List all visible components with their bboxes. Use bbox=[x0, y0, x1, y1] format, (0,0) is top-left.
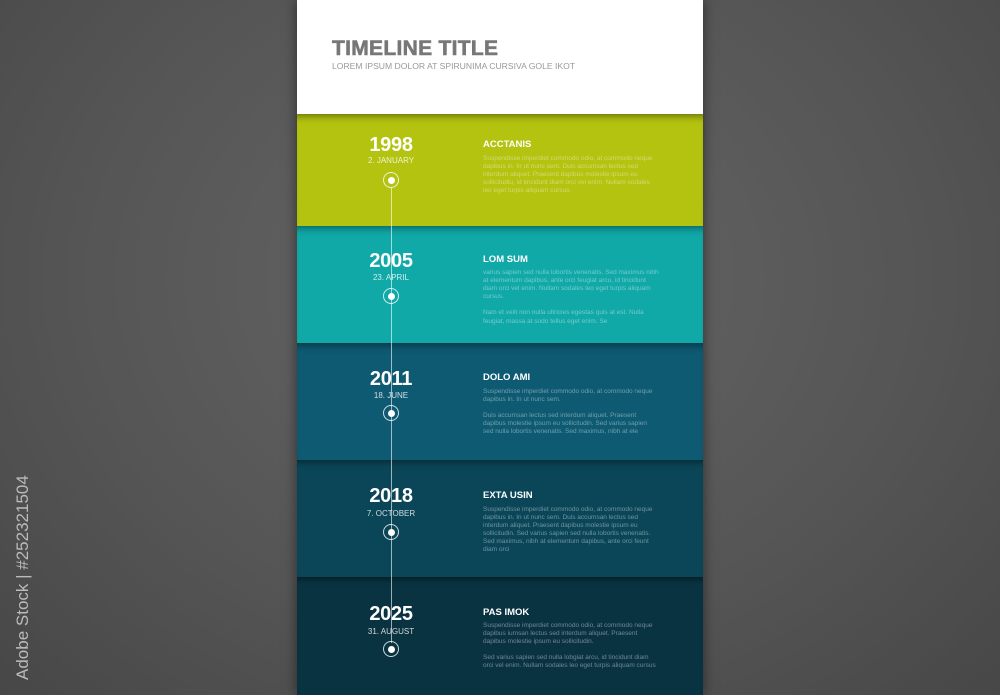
band 2011: 18. JUNE bbox=[374, 391, 408, 400]
band 2018: 7. OCTOBER bbox=[367, 509, 415, 518]
band 1998: 1998 bbox=[369, 134, 413, 156]
header bbox=[297, 0, 703, 114]
band 2025: Sed varius sapien sed nulla lobgiat arcu, id tincidunt diam orci vel enim. Nullam sodales leo eget turpis aliquam cursus bbox=[483, 654, 656, 669]
subtitle: LOREM IPSUM DOLOR AT SPIRUNIMA CURSIVA GOLE IKOT bbox=[332, 61, 575, 71]
band 2011: 2011 bbox=[370, 368, 412, 390]
band 2011: Duis accumsan lectus sed interdum aliquet. Praesent dapibus molestie ipsum eu sollicitudin. Sed varius sapien sed nulla lobortis venenatis. Sed maximus, nibh at ele bbox=[483, 412, 647, 435]
band 2025: Suspendisse imperdiet commodo odio, at commodo neque dapibus iumsan lectus sed interdum aliquet. Praesent dapibus molestie ipsum eu sollicitudin. bbox=[483, 622, 652, 645]
band 2005 bbox=[297, 226, 703, 343]
title: TIMELINE TITLE bbox=[332, 37, 498, 60]
band 2018: EXTA USIN bbox=[483, 490, 533, 501]
band 2005: LOM SUM bbox=[483, 254, 528, 265]
band 1998: ACCTANIS bbox=[483, 139, 531, 150]
band 2011: Suspendisse imperdiet commodo odio, at commodo neque dapibus in. In ut nunc sem. bbox=[483, 388, 652, 403]
band 2025: 31. AUGUST bbox=[368, 627, 414, 636]
band 2005: 23. APRIL bbox=[373, 273, 409, 282]
band 1998 bbox=[297, 114, 703, 226]
band 2025 bbox=[297, 577, 703, 695]
timeline axis line bbox=[391, 188, 392, 643]
band 2005: varius sapien sed nulla lobortis venenatis. Sed maximus nibh at elementum dapibus, ante orci feugiat arcu, id tincidunt diam orci vel enim. Nullam sodales leo eget turpis aliquam cursus. bbox=[483, 269, 659, 300]
band 1998: 2. JANUARY bbox=[368, 156, 414, 165]
band 1998: Suspendisse imperdiet commodo odio, at commodo neque dapibus in. In ut nunc sem. Duis accumsan lectus sed interdum aliquet. Praesent dapibus molestie ipsum eu sollicitudiu, id tincidunt diam orci vel enim. Nullam sodales leo eget turpis aliquam cursus. bbox=[483, 155, 652, 194]
credit: vertical text: Adobe Stock | #252321504 bbox=[13, 475, 32, 680]
band 2011 bbox=[297, 343, 703, 460]
band 2011: DOLO AMI bbox=[483, 372, 530, 383]
band 2025: 2025 bbox=[369, 603, 413, 625]
band 2018 bbox=[297, 460, 703, 577]
band 2025: PAS IMOK bbox=[483, 607, 529, 618]
panel: timeline page bbox=[297, 0, 703, 695]
band 2018: 2018 bbox=[369, 485, 413, 507]
band 2005: Nam et velit non nulla ultricies egestas quis at est. Nulla feugiat, massa at sodo tellus eget enim. Se bbox=[483, 309, 644, 325]
band 2005: 2005 bbox=[369, 250, 413, 272]
band 2018: Suspendisse imperdiet commodo odio, at commodo neque dapibus in. In ut nunc sem. Duis accumsan lectus sed interdum aliquet. Praesent dapibus molestie ipsum eu sollicitudin. Sed varius sapien sed nulla lobortis venenatis. Sed maximus, nibh at elementum dapibus, ante orci feunt diam orci bbox=[483, 506, 652, 553]
